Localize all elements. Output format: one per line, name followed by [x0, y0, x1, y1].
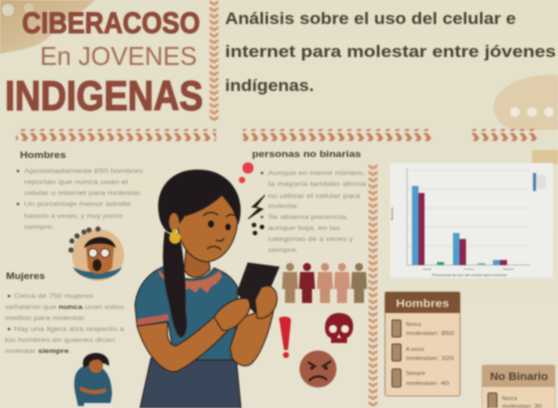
text block: Hombres: Aproximadamente 850 hombres	[24, 168, 143, 175]
text block: Mujeres: Hay una ligera alza respecto a	[14, 326, 125, 333]
chart axis labels: Frecuencia de uso del celular para molestar	[432, 273, 508, 277]
skirt	[140, 356, 241, 408]
card: Hombres	[385, 292, 460, 396]
blue blouse	[135, 267, 238, 360]
hand on phone	[255, 286, 277, 318]
icon: skull	[325, 313, 353, 343]
phone row: a veces: A veces	[406, 347, 425, 353]
phone row: nunca: Nunca	[406, 322, 421, 328]
text block: Hombres: siempre.	[24, 224, 54, 231]
sleeve trim	[137, 314, 169, 326]
icon: black dots	[252, 223, 264, 235]
right arm	[230, 308, 274, 366]
chart axis labels: Nunca	[423, 267, 432, 271]
neck	[184, 250, 210, 278]
chart legend	[533, 173, 546, 191]
icon: angry face	[300, 350, 336, 388]
bars: third group	[493, 260, 507, 265]
title	[5, 7, 203, 119]
left arm	[137, 317, 230, 372]
phone row: nunca: molestan: 850	[406, 331, 454, 337]
vertical chevron divider: center	[368, 164, 378, 408]
phone row: siempre	[392, 369, 449, 387]
phone row: nunca	[488, 393, 542, 408]
icon: red exclamation mark	[279, 317, 291, 358]
text block: Hombres: hacerlo a veces, y muy pocos	[24, 213, 123, 220]
card: No Binario	[482, 365, 555, 408]
icon: shouting man avatar	[68, 226, 124, 281]
text block: Hombres: Un porcentaje menor admite	[24, 201, 132, 208]
bars: first group	[412, 186, 444, 265]
text block: Mujeres: Cerca de 750 mujeres	[14, 293, 93, 300]
bar chart	[390, 163, 553, 278]
card: No Binario: No Binario	[490, 371, 548, 383]
phone row: nunca	[392, 320, 454, 337]
text block: Mujeres: señalaron que nunca usan estos	[5, 304, 124, 311]
text block: personas no binarias: molestar.	[268, 203, 299, 210]
phone	[237, 263, 279, 316]
text block: personas no binarias	[252, 149, 367, 254]
text block: personas no binarias: personas no binarias	[252, 149, 361, 160]
text block: Hombres: celular o internet para molestar.	[24, 190, 142, 197]
icon: sad seated girl	[74, 353, 112, 408]
text block: Mujeres: Mujeres	[6, 271, 45, 282]
phone row: a veces: molestan: 320	[406, 356, 454, 362]
subtitle: Análisis sobre el uso del celular e	[225, 10, 516, 28]
title: INDIGENAS	[5, 72, 203, 119]
text block: personas no binarias: Aunque en menor número,	[268, 170, 365, 177]
phone row: a veces	[392, 344, 454, 362]
braid	[163, 232, 186, 337]
text block: Hombres: reportan que nunca usan el	[24, 179, 128, 186]
text block: personas no binarias: aunque baja, en las	[268, 225, 340, 232]
subtitle	[225, 10, 556, 95]
phone row: siempre: molestan: 40	[406, 381, 449, 387]
text block: Mujeres: los hombres en quienes dicen	[5, 337, 116, 344]
title: CIBERACOSO	[22, 7, 200, 40]
blouse embroidery	[158, 269, 222, 293]
icon: red dots	[239, 162, 254, 183]
text block: Mujeres	[5, 271, 125, 355]
ear	[169, 213, 179, 231]
chart axis labels: A veces	[464, 267, 474, 271]
hand	[214, 298, 250, 330]
chart axis labels: Recuento	[390, 207, 394, 220]
text block: Mujeres: molestar siempre .	[5, 348, 71, 355]
chart axis labels	[390, 207, 514, 277]
subtitle: indígenas.	[225, 77, 314, 95]
title: En JOVENES	[40, 41, 197, 71]
earring	[169, 229, 181, 244]
card: Hombres: Hombres	[396, 298, 449, 310]
phone row: nunca: Nunca	[502, 396, 517, 402]
background blob: top right with dots	[494, 75, 558, 130]
text block: personas no binarias: siempre.	[268, 247, 298, 254]
face	[177, 190, 238, 262]
eyes	[208, 220, 231, 230]
icon group: five people	[282, 263, 367, 303]
text block: personas no binarias: la mayoría también afirma	[268, 181, 367, 188]
text block: Hombres	[17, 150, 143, 231]
phone row: siempre: Siempre	[406, 371, 425, 377]
text block: Mujeres: medios para molestar.	[5, 315, 86, 322]
bars: second group	[453, 233, 485, 265]
hair	[159, 170, 240, 232]
vertical chevron divider: title	[209, 0, 219, 122]
chart axis labels: Siempre	[503, 267, 514, 271]
brows and mouth	[203, 212, 236, 250]
text block: Hombres: Hombres	[20, 150, 66, 161]
subtitle: internet para molestar entre jóvenes	[225, 43, 556, 61]
horizontal chevron divider	[16, 129, 538, 141]
text block: personas no binarias: categorías de a veces y	[268, 236, 354, 243]
text block: personas no binarias: Se observa presencia,	[268, 214, 348, 221]
illustration: girl with phone	[135, 170, 279, 408]
icon: lightning bolt	[248, 195, 265, 219]
background blob: top left	[0, 0, 95, 54]
background blob: behind chart	[532, 150, 558, 164]
text block: personas no binarias: no utilizar el celular para	[268, 193, 361, 200]
